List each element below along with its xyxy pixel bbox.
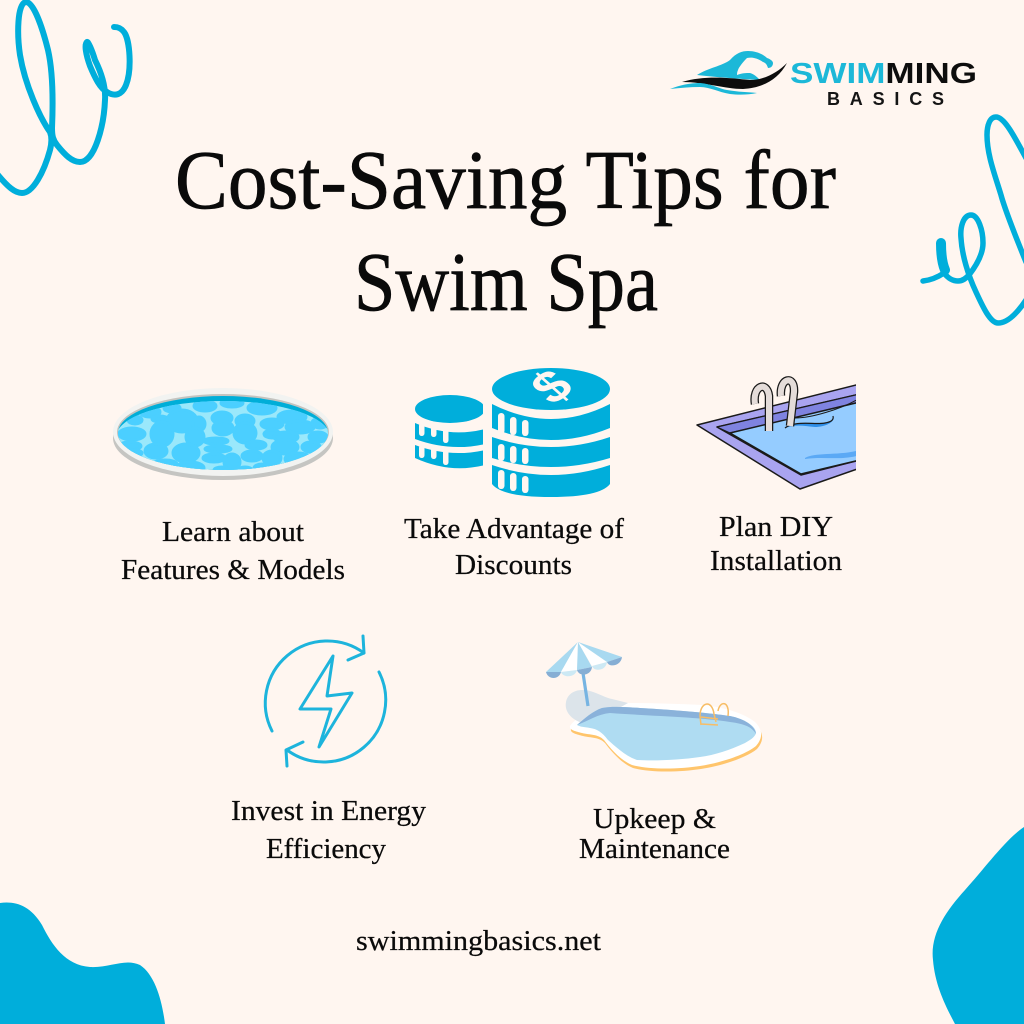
- label: upkeep: Maintenance: [579, 833, 730, 865]
- label: learn about: Features & Models: [121, 554, 345, 586]
- label: energy efficiency: [231, 795, 427, 865]
- label: discounts: Discounts: [455, 549, 572, 581]
- label: DIY installation: [710, 511, 842, 577]
- scribble: top right: [923, 117, 1024, 323]
- label: upkeep: Upkeep &: [593, 803, 716, 835]
- label: DIY installation: Plan DIY: [719, 511, 833, 543]
- scribble: top left: [0, 2, 130, 193]
- umbrella pole: [583, 673, 588, 706]
- pool water: [577, 707, 756, 760]
- label: upkeep: [579, 803, 730, 865]
- title: Swim Spa: [354, 236, 658, 329]
- title: Cost-Saving Tips for: [175, 134, 836, 227]
- pool rim: [570, 703, 761, 768]
- logo: Swimming Basics: [670, 51, 977, 109]
- large coin stack: [492, 359, 610, 497]
- label: learn about: [121, 516, 345, 586]
- logo swimmer icon: [670, 51, 787, 95]
- icon: round pool: [113, 388, 333, 480]
- label: discounts: Take Advantage of: [404, 513, 624, 545]
- pool orange base: [571, 706, 762, 772]
- icon: rectangular pool with ladder: [697, 380, 860, 489]
- dollar sign: $: [519, 359, 584, 413]
- blob: bottom right: [933, 827, 1024, 1024]
- title: [175, 134, 836, 329]
- icon: coin stacks: [415, 359, 610, 497]
- icon: energy cycle bolt: [265, 636, 386, 766]
- small coin stack: [415, 395, 485, 468]
- label: discounts: [404, 513, 624, 581]
- label: DIY installation: Installation: [710, 545, 842, 577]
- icon: pool with umbrella: [546, 642, 762, 772]
- label: energy efficiency: Efficiency: [266, 833, 386, 865]
- label: learn about: Learn about: [162, 516, 304, 548]
- logo wordmark: SWIM MING: [790, 58, 977, 90]
- website url: swimmingbasics.net: [356, 925, 601, 957]
- label: energy efficiency: Invest in Energy: [231, 795, 427, 827]
- umbrella canopy: [546, 642, 622, 678]
- pool ladder: [700, 704, 728, 725]
- ladder tubes: [755, 387, 769, 431]
- logo subtitle: BASICS: [827, 89, 944, 109]
- blob: bottom left: [0, 903, 165, 1024]
- umbrella shadow: [566, 690, 628, 725]
